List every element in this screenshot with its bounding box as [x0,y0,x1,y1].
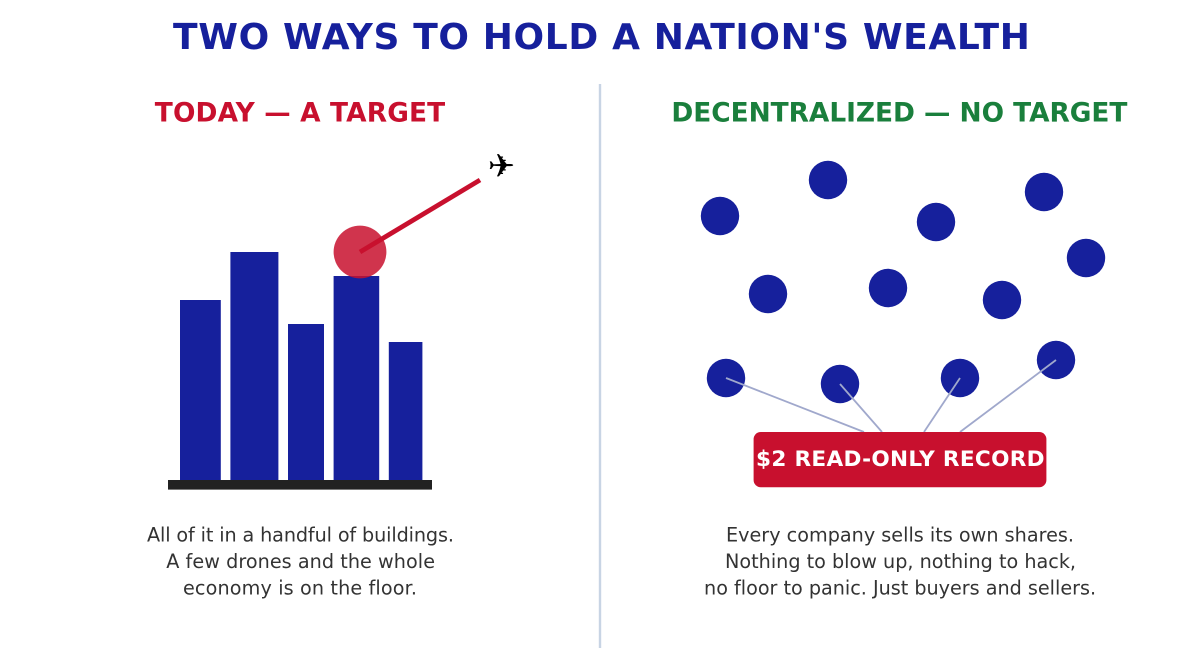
caption: decentralized: Nothing to blow up, nothing to hack, [725,550,1076,573]
heading: decentralized: DECENTRALIZED — NO TARGET [671,97,1127,128]
bar chart: buildings [180,252,422,480]
panel: today, a target [147,97,515,599]
target circle [334,226,386,278]
drone strike path [360,180,480,252]
heading: today: TODAY — A TARGET [155,97,445,128]
title: TWO WAYS TO HOLD A NATION'S WEALTH [173,17,1030,58]
caption: today: All of it in a handful of buildings. [147,524,454,547]
icon: plane: ✈ [488,147,515,185]
panel: decentralized, no target [671,97,1127,599]
record box: $2 READ-ONLY RECORD [756,447,1045,472]
caption: today: economy is on the floor. [183,576,417,599]
company dots [701,161,1105,403]
caption: decentralized: Every company sells its own shares. [726,524,1074,547]
connector lines [726,360,1056,432]
caption: decentralized: no floor to panic. Just buyers and sellers. [704,576,1096,599]
caption: today: A few drones and the whole [166,550,435,573]
record box [754,432,1046,487]
ground line [168,480,432,490]
